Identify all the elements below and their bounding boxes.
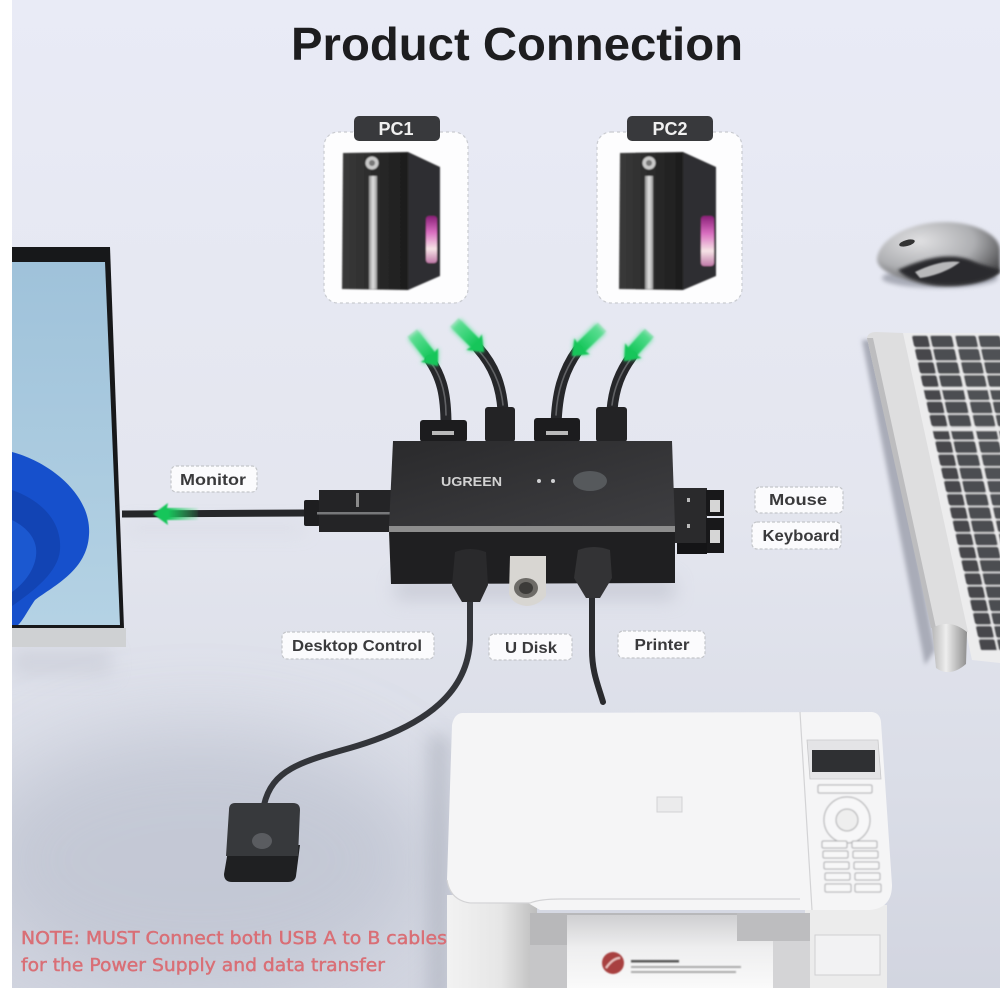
- icon: windows bloom: [12, 452, 89, 625]
- arrow: PC1 first: [403, 326, 447, 373]
- icon: PC2 tower: [619, 152, 716, 290]
- mouse body: [877, 222, 1000, 286]
- plug: U disk: [509, 556, 546, 606]
- mouse dark underside: [898, 257, 1000, 285]
- puck top: [226, 803, 300, 856]
- arrow: monitor: [153, 503, 198, 525]
- mouse: [877, 222, 1000, 288]
- label: Monitor: Monitor: [180, 472, 246, 489]
- USB plugs on top of hub: [420, 407, 627, 442]
- keyboard: [862, 332, 1000, 672]
- plug: PC1 USB-A: [485, 407, 515, 442]
- label: Mouse: [755, 487, 843, 513]
- cable: PC2 second: [612, 356, 632, 410]
- monitor HDMI plug: [304, 490, 391, 532]
- bottom plugs: [452, 547, 612, 606]
- note text: for the Power Supply and data transfer: [21, 955, 386, 976]
- hub brand: UGREEN: [441, 475, 502, 489]
- icon: PC1 tower: [342, 152, 440, 290]
- monitor: [12, 247, 126, 647]
- label: PC2: [627, 116, 713, 141]
- keyboard base: [903, 333, 1000, 663]
- puck button: [252, 833, 272, 849]
- printer lid and control panel: [447, 712, 892, 910]
- plug: mouse: [673, 488, 724, 516]
- plug: desktop control: [452, 549, 488, 602]
- arrow: PC2 first: [564, 319, 610, 364]
- hub front face: [389, 532, 675, 584]
- keyboard hinge cylinder: [932, 624, 967, 672]
- printer lower body right: [805, 905, 887, 988]
- note text: NOTE: MUST Connect both USB A to B cables: [21, 928, 447, 949]
- mouse shadow: [882, 268, 998, 288]
- card: PC1: [324, 132, 468, 303]
- label: U Disk: [489, 634, 572, 660]
- printer paper front tray: [815, 935, 880, 975]
- printer paper slot: [530, 913, 810, 988]
- cable: PC2 first: [556, 350, 578, 425]
- printer lower body left: [447, 895, 537, 988]
- monitor frame: [12, 247, 124, 628]
- printer lcd: [807, 740, 881, 779]
- label: Keyboard: Keyboard: [762, 528, 840, 545]
- printed page content: [602, 952, 741, 974]
- card: PC2: [597, 132, 742, 303]
- printer logo mark: [657, 797, 682, 812]
- hub top face: [389, 441, 675, 527]
- printer: [447, 712, 892, 988]
- label: Desktop Control: Desktop Control: [292, 638, 422, 655]
- hub LEDs: [537, 479, 555, 483]
- bottom cables: [264, 595, 603, 805]
- keyboard shadow: [862, 340, 935, 665]
- cable: printer: [592, 595, 603, 702]
- cable: monitor: [122, 513, 306, 514]
- panel: PC1: [324, 116, 468, 303]
- note text: [21, 928, 447, 976]
- label: Keyboard: [752, 522, 841, 549]
- mouse highlight: [915, 262, 960, 278]
- keyboard palm rest: [867, 332, 968, 632]
- desktop control puck: [224, 803, 300, 882]
- monitor screen: [12, 262, 120, 625]
- plug: PC2 USB-B: [534, 418, 580, 442]
- label: PC2: PC2: [652, 119, 688, 139]
- cables to PCs: [430, 348, 632, 425]
- label: Monitor: [171, 466, 257, 492]
- arrow: PC2 second: [616, 325, 658, 368]
- label: Mouse: Mouse: [769, 492, 827, 509]
- keyboard keys: [912, 335, 1000, 650]
- mouse wheel: [898, 238, 916, 248]
- cable: PC1 first: [430, 360, 446, 425]
- plug: keyboard: [673, 515, 724, 554]
- panel: PC2: [597, 116, 742, 303]
- right side plugs: [673, 488, 724, 554]
- label: Desktop Control: [282, 632, 434, 659]
- plug: PC2 USB-A: [596, 407, 627, 442]
- label: PC1: [354, 116, 440, 141]
- arrow glow: [404, 315, 657, 373]
- cable: desktop control: [264, 600, 470, 805]
- printer lid seam: [447, 712, 812, 910]
- hub button: [573, 471, 607, 491]
- printer buttons: [818, 785, 881, 892]
- hub metal strip: [389, 526, 675, 532]
- soft shadows on desk: [12, 583, 676, 988]
- monitor silver base edge: [12, 628, 126, 647]
- label: PC1: PC1: [378, 119, 414, 139]
- arrows: green to PCs: [403, 315, 658, 373]
- label: Printer: [618, 631, 705, 658]
- cable: PC1 second: [478, 348, 503, 410]
- title: Product Connection: [291, 18, 743, 70]
- puck front: [224, 845, 300, 882]
- plug: printer: [574, 547, 612, 598]
- arrow: PC1 second: [447, 315, 492, 360]
- keyboard edge: [867, 338, 936, 628]
- switch hub: [389, 441, 675, 584]
- plug: PC1 USB-B: [420, 420, 467, 442]
- label: Printer: Printer: [634, 637, 690, 654]
- label: U Disk: U Disk: [505, 640, 557, 657]
